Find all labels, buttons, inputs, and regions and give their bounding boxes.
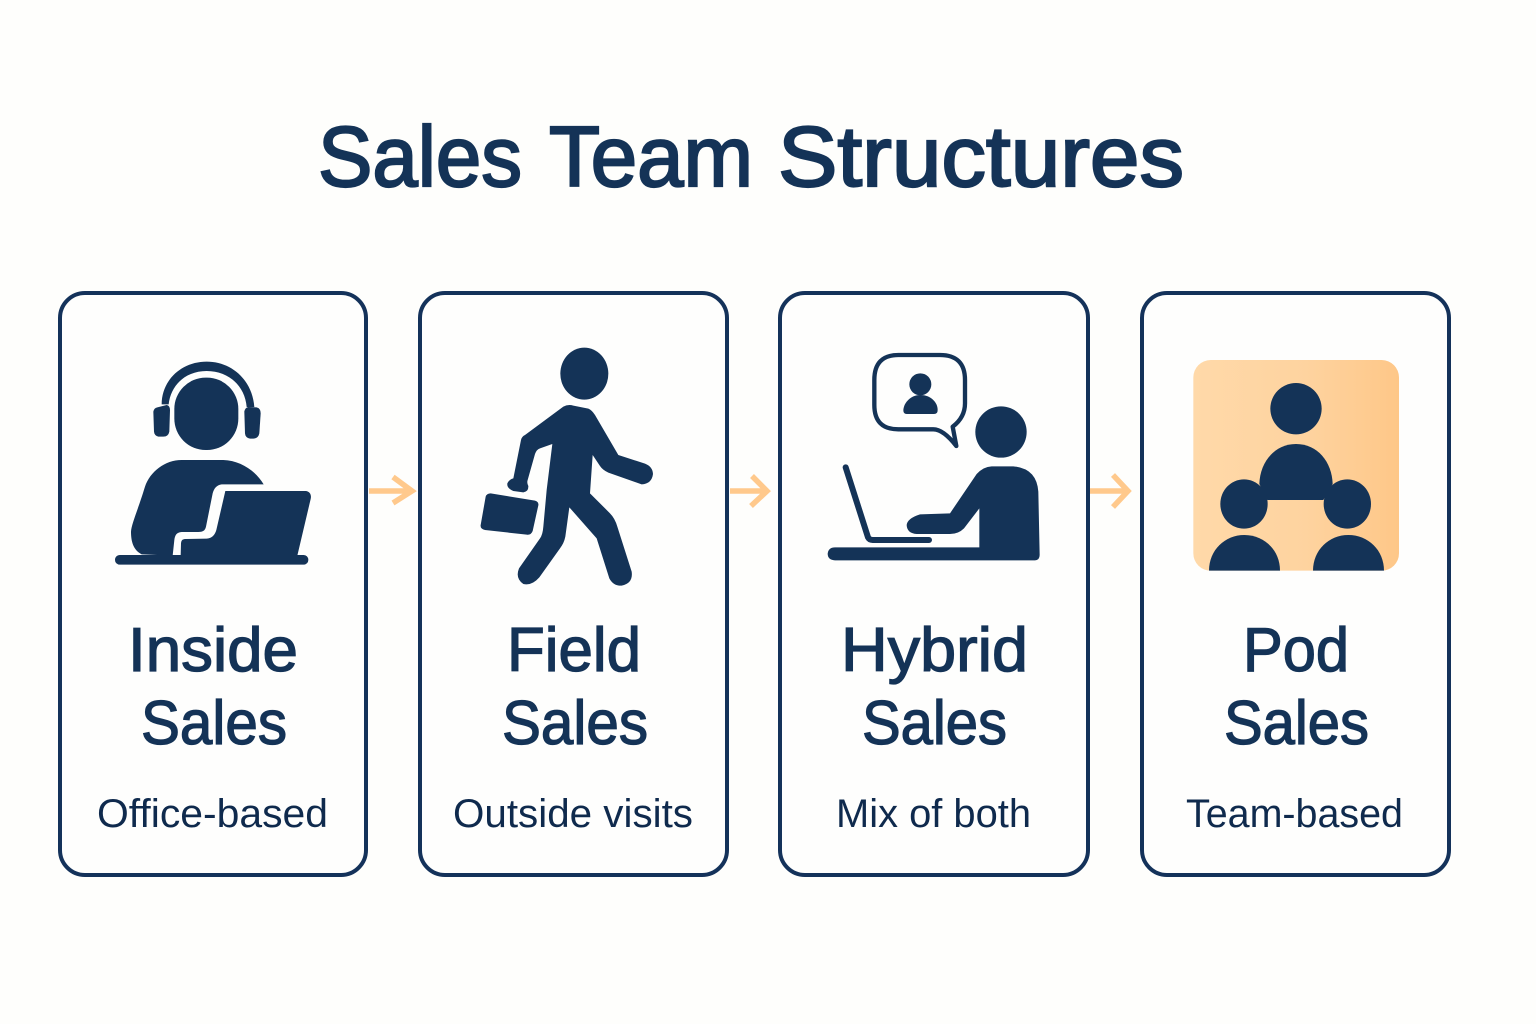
- label: Field Sales: [502, 616, 648, 758]
- panel: Pod Sales: [1142, 293, 1449, 875]
- arrow: Hybrid to Pod: [1090, 475, 1128, 507]
- panel: Field Sales: [420, 293, 727, 875]
- icon: team pod on orange tile: [1193, 360, 1399, 571]
- label: Pod Sales: Sales: [1224, 689, 1369, 758]
- label: Hybrid Sales: [841, 616, 1028, 758]
- description: Office-based: Office-based: [97, 792, 328, 836]
- title: Structures: [778, 110, 1184, 205]
- icon: headset agent at laptop: [115, 362, 311, 565]
- icon: person at laptop with speech bubble: [828, 355, 1040, 560]
- card frame: Pod Sales: [1142, 293, 1449, 875]
- label: Inside Sales: Sales: [141, 689, 287, 758]
- description: Team-based: Team-based: [1186, 792, 1403, 836]
- label: Field Sales: Sales: [502, 689, 648, 758]
- icon: walking person with briefcase: [481, 348, 653, 586]
- label: Hybrid Sales: Sales: [862, 689, 1007, 758]
- title: Team: [549, 110, 753, 205]
- card frame: Field Sales: [420, 293, 727, 875]
- label: Pod Sales: [1224, 616, 1369, 758]
- label: Field Sales: Field: [507, 616, 641, 685]
- card frame: Hybrid Sales: [780, 293, 1088, 875]
- panel: Hybrid Sales: [780, 293, 1088, 875]
- description: Mix of both: Mix of both: [836, 792, 1031, 836]
- arrow: Field to Hybrid: [730, 476, 767, 506]
- panel: Inside Sales: [60, 293, 366, 875]
- orange tile: [1193, 360, 1399, 571]
- arrow: Inside to Field: [369, 477, 412, 503]
- label: Inside Sales: [128, 616, 298, 758]
- card frame: Inside Sales: [60, 293, 366, 875]
- speech bubble: [874, 355, 965, 446]
- label: Inside Sales: Inside: [128, 616, 298, 685]
- title: [318, 110, 1184, 205]
- title: Sales: [318, 110, 522, 205]
- label: Pod Sales: Pod: [1243, 616, 1349, 685]
- description: Outside visits: Outside visits: [453, 792, 693, 836]
- label: Hybrid Sales: Hybrid: [841, 616, 1028, 685]
